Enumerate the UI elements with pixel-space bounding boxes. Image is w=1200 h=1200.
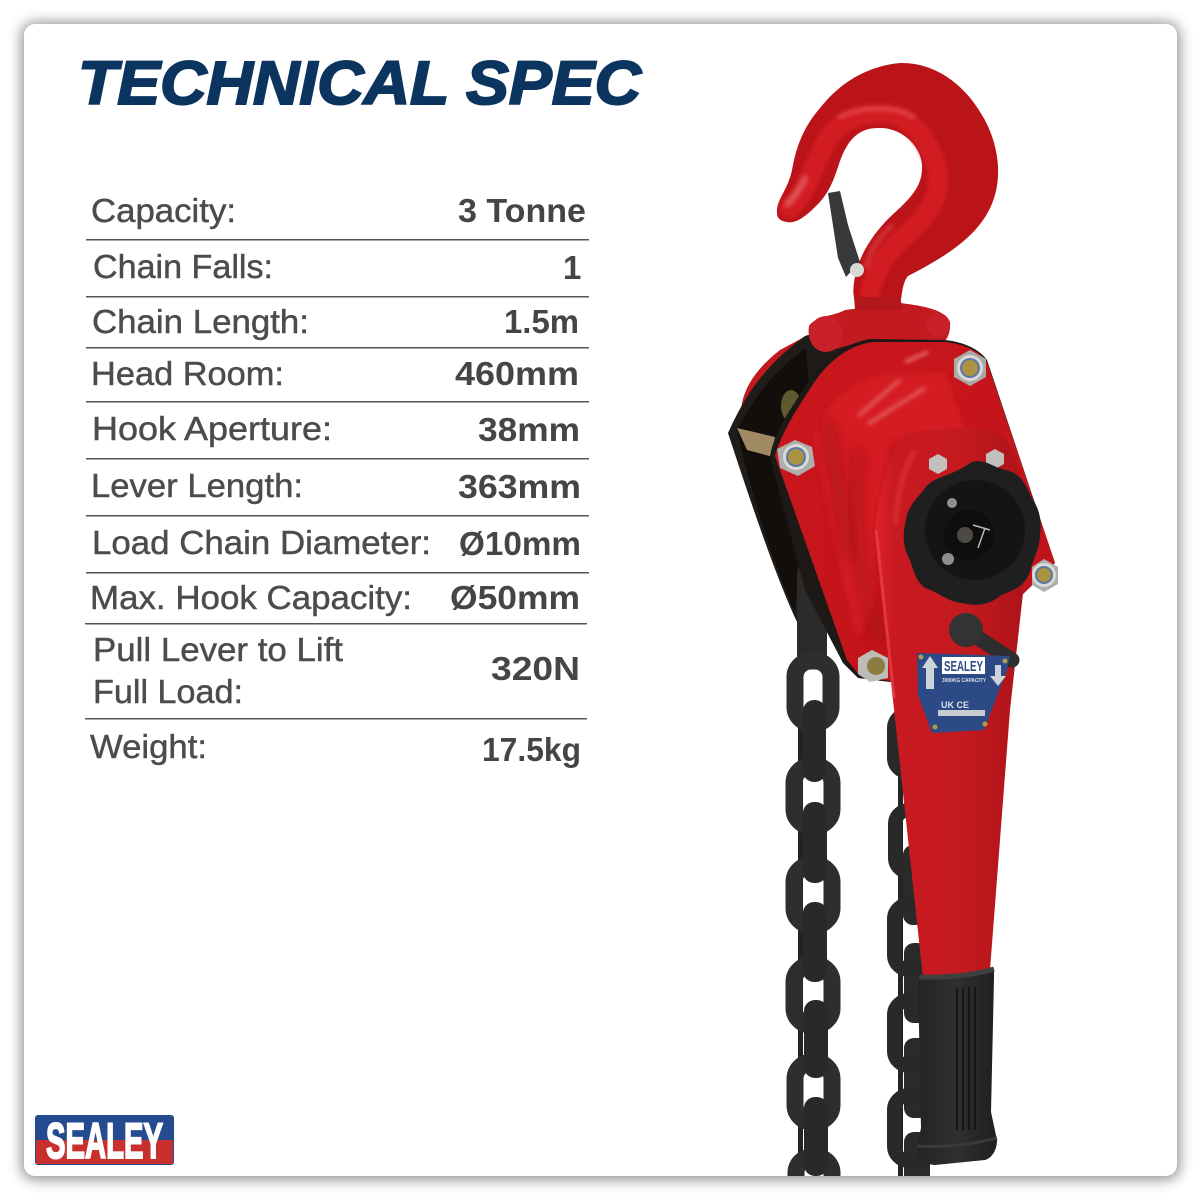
row: chain falls: Chain Falls: xyxy=(93,248,273,285)
row: capacity: 3 Tonne xyxy=(458,192,586,229)
row: max hook capacity: Ø50mm xyxy=(450,579,580,616)
left chain xyxy=(794,560,832,1200)
ratchet handle xyxy=(949,613,1012,660)
row: chain length: Chain Length: xyxy=(92,303,309,340)
row: hook aperture: 38mm xyxy=(478,411,580,448)
right chain xyxy=(894,705,930,1192)
row: lever length: Lever Length: xyxy=(91,467,303,504)
row: chain falls: 1 xyxy=(563,249,581,286)
row: max hook capacity xyxy=(90,579,580,616)
row: lever length: 363mm xyxy=(458,468,581,505)
row: head room xyxy=(91,355,579,392)
row: capacity xyxy=(91,192,586,229)
row: max hook capacity: Max. Hook Capacity: xyxy=(90,579,412,616)
row: hook aperture xyxy=(92,410,580,448)
row: lever length xyxy=(91,467,581,505)
icon: hook latch xyxy=(828,191,860,277)
row: pull lever: 320N xyxy=(491,650,580,687)
product plate: 3000KG CAPACITY xyxy=(942,678,986,684)
row: load chain diameter xyxy=(92,524,581,562)
row: chain length: 1.5m xyxy=(504,303,579,340)
row: head room: Head Room: xyxy=(91,355,284,392)
spec table xyxy=(85,192,589,768)
product plate: UK CE xyxy=(941,700,969,710)
title: TECHNICAL SPEC xyxy=(78,49,642,117)
lever grip xyxy=(917,969,997,1165)
product plate xyxy=(917,653,1010,733)
row: load chain diameter: Ø10mm xyxy=(459,525,581,562)
product plate: SEALEY xyxy=(944,658,983,675)
row: pull lever: Pull Lever to Lift xyxy=(93,631,343,668)
row: weight: Weight: xyxy=(90,728,207,765)
row: chain length xyxy=(92,303,579,340)
yoke xyxy=(809,297,950,352)
lever xyxy=(875,429,1023,978)
logo: Sealey: SEALEY xyxy=(46,1113,163,1169)
product: chain hoist xyxy=(728,63,1058,1200)
row: load chain diameter: Load Chain Diameter: xyxy=(92,524,431,561)
hook xyxy=(777,63,998,305)
front plate xyxy=(770,339,1055,682)
row: weight: 17.5kg xyxy=(482,731,581,768)
logo: Sealey xyxy=(35,1113,174,1169)
row: pull lever: Full Load: xyxy=(93,673,243,710)
row: hook aperture: Hook Aperture: xyxy=(92,410,332,447)
row: capacity: Capacity: xyxy=(91,192,236,229)
back housing xyxy=(728,334,850,622)
row: chain falls xyxy=(93,248,581,286)
row: head room: 460mm xyxy=(455,355,579,392)
row: pull lever xyxy=(93,631,580,710)
knob xyxy=(904,461,1041,605)
row: weight xyxy=(90,728,581,768)
bolts xyxy=(777,350,1058,682)
